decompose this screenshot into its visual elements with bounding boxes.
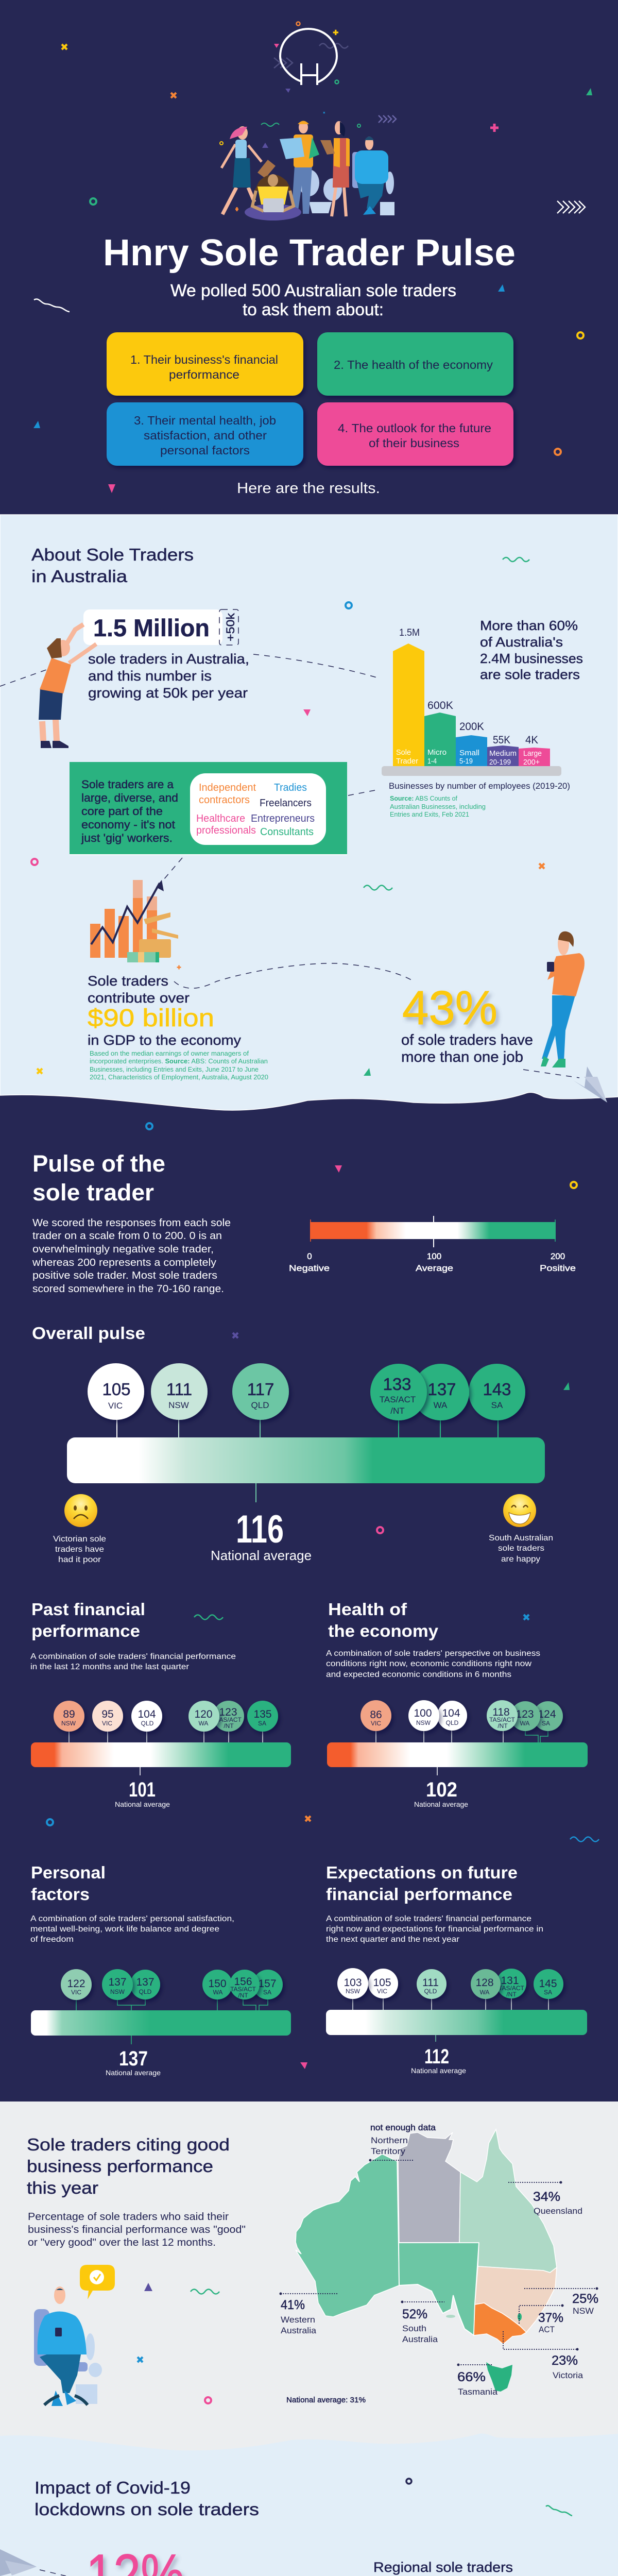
NT label: not enough data: [370, 2123, 436, 2132]
header confetti: [33, 22, 592, 493]
section background: covid impact: [0, 2421, 618, 2576]
pulse explanation text: [32, 1217, 231, 1295]
man in blue sitting: [352, 137, 388, 215]
VIC label: [552, 2353, 583, 2380]
card 3: mental health: personal factors: [160, 444, 250, 457]
balloon QLD: 117: [247, 1380, 274, 1399]
panel: personal factors: [30, 1863, 291, 2077]
chart: businesses by number of employees: 20-199: [489, 758, 511, 767]
panel: personal factors: National average: [106, 2069, 161, 2077]
heading: good business performance: [27, 2135, 230, 2197]
card 2: health of economy: 2. The health of the economy: [334, 358, 493, 371]
balloons: VIC: [71, 1989, 81, 1996]
panel: expectations on future financial performance: right now and expectations for financial performance in: [326, 1925, 543, 1934]
stat: 43 percent more than one job: [401, 981, 533, 1065]
stat: 90 billion GDP: 2021, Characteristics of Employment, Australia, August 2020: [90, 1073, 268, 1081]
chart: businesses by number of employees: 1-4: [427, 757, 437, 766]
heading: pulse of the sole trader: Pulse of the: [32, 1150, 165, 1177]
balloons: 150: [208, 1978, 227, 1990]
stat: 43 percent more than one job: more than one job: [401, 1049, 523, 1065]
heading: impact of covid lockdowns: Impact of Covid-19: [35, 2478, 191, 2497]
chart: businesses by number of employees: Trader: [396, 757, 418, 766]
balloons: 104: [138, 1708, 156, 1720]
balloon VIC: 105: [102, 1380, 131, 1399]
sole traders growth text: [88, 651, 249, 701]
caption: victorian sole traders: [53, 1535, 106, 1564]
panel: past financial performance: in the last 12 months and the last quarter: [30, 1663, 189, 1671]
panel: expectations on future financial performance: the next quarter and the next year: [326, 1935, 459, 1944]
balloons: 100: [414, 1707, 432, 1719]
scale legend 0 to 200: 0: [307, 1251, 312, 1261]
caption: south australian sole traders: sole traders: [498, 1544, 544, 1553]
stat: 43 percent more than one job: of sole traders have: [401, 1032, 533, 1048]
stat: 90 billion GDP: Based on the median earnings of owner managers of: [90, 1049, 249, 1057]
balloons: /NT: [497, 1722, 508, 1730]
national average 31 percent: National average: 31%: [286, 2396, 366, 2404]
panel: health of the economy: conditions right now, economic conditions right now: [326, 1659, 532, 1668]
scale legend 0 to 200: 100: [427, 1251, 441, 1261]
balloon WA: WA: [434, 1400, 448, 1410]
text: more than 60 percent: 2.4M businesses: [480, 651, 583, 666]
heading: about sole traders: [31, 545, 194, 586]
heading: regional sole traders: Regional sole traders: [373, 2560, 513, 2575]
heading: pulse of the sole trader: [32, 1150, 165, 1206]
panel: expectations on future financial performance: financial performance: [326, 1885, 512, 1904]
confetti: [137, 2283, 219, 2403]
TAS label: [457, 2370, 498, 2397]
illustration: paper plane: [0, 2549, 37, 2576]
illustration: man on chair with phone: [34, 2286, 102, 2406]
balloons: 105: [373, 1977, 391, 1989]
sole traders growth text: and this number is: [88, 668, 212, 684]
WA label: Australia: [281, 2326, 317, 2335]
balloons: TAS/ACT: [499, 1985, 525, 1992]
balloons: QLD: [424, 1988, 437, 1995]
balloons: [360, 1700, 563, 1731]
stat: 90 billion GDP: Sole traders: [88, 973, 168, 989]
balloons: WA: [199, 1720, 208, 1727]
panel: personal factors: factors: [31, 1885, 90, 1904]
balloon VIC: [88, 1363, 144, 1420]
woman with clipboard: [320, 121, 350, 216]
balloons: SA: [263, 1989, 271, 1996]
text: more than 60 percent: [480, 618, 583, 682]
heading: impact of covid lockdowns: lockdowns on sole traders: [35, 2500, 259, 2519]
QLD label: [533, 2190, 582, 2216]
WA label: 41%: [281, 2298, 305, 2312]
balloons: [54, 1701, 278, 1732]
balloons: 131: [501, 1975, 519, 1987]
caption: south australian sole traders: [489, 1534, 553, 1564]
balloon SA: SA: [491, 1400, 503, 1410]
balloons: [61, 1969, 283, 2000]
panel: health of the economy: National average: [414, 1800, 468, 1808]
TAS label: Tasmania: [458, 2387, 498, 2397]
chart: businesses by number of employees: Small: [459, 749, 479, 757]
balloon QLD: [232, 1363, 289, 1420]
balloon TAS/ACT/NT: TAS/ACT: [380, 1395, 416, 1404]
NT label: [370, 2123, 436, 2156]
subtitle: We polled 500 Australian sole traders: [170, 281, 456, 300]
panel: health of the economy: and expected economic conditions in 6 months: [326, 1670, 511, 1679]
woman with briefcase: [221, 126, 276, 214]
panel: diverse sole traders: core part of the: [81, 805, 163, 818]
balloon NSW: NSW: [168, 1400, 189, 1410]
balloons: VIC: [377, 1988, 387, 1995]
heading: good business performance: Sole traders citing good: [27, 2135, 230, 2154]
balloons: 137: [108, 1976, 127, 1988]
balloons: /NT: [238, 1992, 248, 1999]
card 1: financial performance: 1. Their business's financial: [130, 353, 278, 366]
caption: south australian sole traders: South Australian: [489, 1534, 553, 1543]
heading: about sole traders: in Australia: [31, 567, 128, 586]
balloons: 122: [67, 1978, 85, 1990]
woman on floor with laptop: [245, 174, 301, 221]
balloons: NSW: [346, 1988, 360, 1995]
balloons: 103: [344, 1977, 362, 1989]
stat: 90 billion GDP: contribute over: [88, 990, 190, 1006]
scale legend 0 to 200: [289, 1216, 576, 1273]
balloons: SA: [542, 1720, 550, 1727]
WA label: [281, 2298, 317, 2335]
balloons: 89: [63, 1708, 75, 1720]
text: more than 60 percent: More than 60%: [480, 618, 578, 633]
card 3: mental health: 3. Their mental health, job: [134, 414, 276, 427]
stat: 90 billion GDP: $90 billion: [88, 1005, 214, 1032]
heading: good business performance: business performance: [27, 2157, 213, 2176]
stat: 90 billion GDP: in GDP to the economy: [88, 1032, 242, 1048]
panel: expectations on future financial performance: National average: [411, 2066, 466, 2075]
balloons: QLD: [139, 1988, 152, 1995]
word cloud of trader types: [190, 773, 326, 845]
national average 116: 116: [236, 1507, 284, 1551]
sole traders growth text: growing at 50k per year: [88, 685, 248, 701]
balloons: [337, 1968, 563, 1999]
panel: past financial performance: [30, 1600, 291, 1808]
pulse section confetti: [47, 1123, 599, 2069]
emoji: sad face: [64, 1494, 97, 1527]
balloon SA: 143: [483, 1380, 511, 1399]
word cloud of trader types: contractors: [199, 794, 250, 806]
panel: personal factors: 137: [119, 2047, 148, 2070]
logo: Hnry H in circle: [280, 29, 337, 85]
balloons: QLD: [141, 1720, 154, 1727]
balloon NSW: [151, 1363, 208, 1420]
about section confetti and dashed paths: [0, 557, 579, 1078]
card 1: financial performance: [107, 332, 303, 396]
balloons: 95: [101, 1708, 114, 1720]
good performance explanation: Percentage of sole traders who said their: [28, 2211, 229, 2223]
chart: businesses by number of employees: 200K: [459, 721, 484, 733]
illustration: man with phone: [541, 931, 585, 1067]
chart: businesses by number of employees: Micro: [427, 748, 447, 757]
word cloud of trader types: Consultants: [260, 826, 314, 838]
panel: diverse sole traders: Sole traders are a: [81, 778, 174, 791]
balloon WA: 137: [427, 1380, 456, 1399]
balloons: VIC: [102, 1720, 112, 1727]
balloons: NSW: [416, 1719, 431, 1726]
heading: pulse of the sole trader: sole trader: [32, 1179, 154, 1206]
heading: good business performance: this year: [27, 2178, 98, 2197]
illustration: paper plane: [573, 1066, 607, 1103]
good performance explanation: business's financial performance was "good": [28, 2224, 246, 2235]
caption: south australian sole traders: are happy: [501, 1555, 540, 1564]
section background: good business performance: [0, 2102, 618, 2450]
chart: businesses by number of employees: 4K: [525, 734, 538, 746]
here are the results: Here are the results.: [237, 480, 380, 497]
good performance explanation: [28, 2211, 246, 2248]
balloons: 120: [194, 1708, 213, 1720]
big number: 1.5 million with +50k tag: 1.5 Million: [93, 614, 210, 641]
balloons: 123: [219, 1706, 237, 1718]
panel: health of the economy: [326, 1600, 588, 1808]
balloons: TAS/ACT: [230, 1986, 256, 1993]
word cloud of trader types: Independent: [199, 782, 256, 793]
good performance explanation: or "very good" over the last 12 months.: [28, 2237, 216, 2248]
balloon TAS/ACT/NT: /NT: [390, 1406, 405, 1416]
panel: health of the economy: 102: [426, 1778, 457, 1801]
word cloud of trader types: Freelancers: [260, 798, 312, 809]
NSW label: [572, 2292, 598, 2316]
chart: businesses by number of employees: 55K: [493, 734, 510, 746]
panel: expectations on future financial performance: [326, 1863, 587, 2075]
NSW label: NSW: [573, 2306, 594, 2316]
balloons: NSW: [110, 1988, 125, 1995]
speech bubble with tick: [80, 2265, 115, 2299]
balloons: WA: [520, 1720, 529, 1727]
balloons: 118: [492, 1706, 510, 1718]
panel: expectations on future financial performance: A combination of sole traders' financial performance: [326, 1914, 531, 1923]
balloon TAS/ACT/NT: [370, 1364, 427, 1420]
balloons: SA: [544, 1989, 552, 1996]
caption: victorian sole traders: Victorian sole: [53, 1535, 106, 1544]
panel: past financial performance: National average: [115, 1800, 170, 1808]
sole traders growth text: sole traders in Australia,: [88, 651, 249, 667]
balloons: /NT: [506, 1991, 517, 1998]
ACT label: ACT: [539, 2325, 555, 2334]
caption: victorian sole traders: traders have: [55, 1545, 104, 1554]
balloons: 111: [422, 1977, 439, 1989]
plant behind group: [299, 170, 394, 215]
stat: 90 billion GDP: Businesses, including Entries and Exits, June 2017 to June: [90, 1065, 259, 1073]
SA label: [402, 2307, 438, 2344]
balloons: 124: [538, 1708, 556, 1720]
word cloud of trader types: Tradies: [274, 782, 307, 793]
panel: personal factors: mental well-being, work life balance and degree: [30, 1925, 219, 1934]
panel: expectations on future financial performance: 112: [424, 2045, 449, 2068]
national average 116: National average: [211, 1548, 312, 1563]
stat: 43 percent more than one job: 43%: [402, 981, 497, 1035]
balloons: 104: [442, 1707, 460, 1719]
stat: 90 billion GDP: [88, 973, 268, 1081]
VIC label: Victoria: [553, 2370, 583, 2380]
panel: past financial performance: A combination of sole traders' financial performance: [30, 1652, 236, 1661]
subtitle: [170, 281, 456, 319]
balloons: WA: [213, 1989, 222, 1996]
panel: health of the economy: A combination of sole traders' perspective on business: [326, 1649, 540, 1658]
panel: personal factors: A combination of sole traders' personal satisfaction,: [30, 1914, 234, 1923]
panel: diverse sole traders: economy - it's not: [81, 818, 175, 831]
QLD label: Queensland: [534, 2206, 582, 2216]
word cloud of trader types: Entrepreneurs: [251, 813, 315, 824]
card 4: outlook: [317, 402, 513, 466]
card 3: mental health: satisfaction, and other: [144, 429, 267, 442]
illustration: man reaching up: [39, 624, 96, 748]
panel: diverse sole traders: just 'gig' workers.: [81, 832, 173, 844]
balloons: 135: [253, 1708, 272, 1720]
balloons: NSW: [61, 1720, 76, 1727]
title: Hnry Sole Trader Pulse: [103, 232, 516, 274]
subtitle: to ask them about:: [243, 300, 384, 319]
section background: about sole traders: [0, 515, 618, 1110]
text: more than 60 percent: of Australia's: [480, 634, 563, 650]
SA label: South: [402, 2324, 426, 2333]
ACT label: [538, 2311, 563, 2334]
word cloud of trader types: Healthcare: [196, 813, 245, 824]
balloons: SA: [258, 1720, 266, 1727]
balloon VIC: VIC: [108, 1401, 123, 1411]
panel: personal factors: of freedom: [30, 1935, 74, 1944]
chart caption and source: [389, 781, 570, 818]
heading: overall pulse: Overall pulse: [32, 1324, 145, 1343]
SA label: 52%: [402, 2307, 427, 2321]
balloons: TAS/ACT: [489, 1716, 516, 1723]
pulse explanation text: whereas 200 represents a completely: [32, 1257, 216, 1268]
covid section confetti and dashed paths: [34, 2479, 618, 2576]
chart caption and source: Australian Businesses, including: [390, 803, 486, 810]
balloons: 123: [516, 1708, 534, 1720]
panel: diverse sole traders: large, diverse, and: [81, 791, 178, 804]
WA label: Western: [281, 2315, 315, 2325]
balloon SA: [469, 1364, 525, 1420]
QLD label: 34%: [533, 2190, 560, 2204]
chart: businesses by number of employees: Sole: [396, 748, 411, 757]
balloon NSW: 111: [166, 1380, 192, 1399]
balloons: 145: [539, 1978, 557, 1990]
card 4: outlook: 4. The outlook for the future: [338, 421, 491, 435]
balloon TAS/ACT/NT: 133: [383, 1375, 411, 1394]
heading: impact of covid lockdowns: [35, 2478, 259, 2519]
card 4: outlook: of their business: [369, 436, 459, 450]
panel: expectations on future financial performance: Expectations on future: [326, 1863, 518, 1882]
chart: businesses by number of employees: Large: [523, 749, 542, 758]
chart: businesses by number of employees: Medium: [489, 749, 517, 758]
big number: 1.5 million with +50k tag: [83, 609, 238, 645]
balloon QLD: QLD: [251, 1400, 269, 1410]
map: good performance by state: [279, 2123, 598, 2397]
NT label: Territory: [371, 2146, 406, 2156]
chart caption and source: Entries and Exits, Feb 2021: [390, 810, 469, 818]
balloons: WA: [480, 1989, 489, 1996]
balloons: /NT: [224, 1722, 234, 1730]
chart: businesses by number of employees: 600K: [427, 700, 453, 711]
balloons: 137: [136, 1976, 154, 1988]
word cloud of trader types: professionals: [196, 825, 256, 836]
national average 116: [211, 1507, 312, 1563]
panel: past financial performance: performance: [31, 1621, 140, 1640]
card 1: financial performance: performance: [169, 368, 239, 381]
chart: businesses by number of employees: 5-19: [459, 757, 473, 766]
NT label: Northern: [371, 2136, 408, 2145]
panel: health of the economy: Health of: [328, 1600, 407, 1619]
pulse explanation text: positive sole trader. Most sole traders: [32, 1270, 217, 1281]
panel: past financial performance: 101: [129, 1778, 156, 1801]
balloons: 156: [234, 1976, 252, 1988]
balloons: 157: [258, 1978, 277, 1990]
text: more than 60 percent: are sole traders: [480, 667, 580, 682]
balloons: 128: [475, 1977, 494, 1989]
scale legend 0 to 200: Average: [416, 1263, 453, 1273]
pulse explanation text: scored somewhere in the 70-160 range.: [32, 1283, 224, 1295]
stat: 90 billion GDP: incorporated enterprises. Source: ABS: Counts of Australian: [90, 1057, 268, 1065]
emoji: happy face: [503, 1494, 536, 1527]
builder with blueprint: [280, 121, 319, 214]
big number: 1.5 million with +50k tag: +50k: [224, 613, 237, 641]
chart caption and source: Source: ABS Counts of: [390, 794, 457, 802]
NSW label: 25%: [572, 2292, 598, 2306]
chart caption and source: Businesses by number of employees (2019-20): [389, 781, 570, 791]
scale legend 0 to 200: 200: [551, 1251, 565, 1261]
panel: past financial performance: Past financial: [31, 1600, 145, 1619]
balloons: TAS/ACT: [216, 1716, 242, 1723]
scale legend 0 to 200: Negative: [289, 1263, 330, 1273]
caption: victorian sole traders: had it poor: [58, 1555, 101, 1564]
card 3: mental health: [107, 402, 303, 466]
scale legend 0 to 200: Positive: [540, 1263, 576, 1273]
balloons: QLD: [446, 1719, 459, 1726]
chart: businesses by number of employees: 200+: [523, 758, 540, 767]
balloon WA: [413, 1364, 469, 1420]
card 2: health of economy: [317, 332, 513, 396]
VIC label: 23%: [552, 2353, 578, 2368]
TAS label: 66%: [457, 2370, 486, 2384]
ACT label: 37%: [538, 2311, 563, 2325]
panel: diverse sole traders: [70, 762, 347, 855]
pulse explanation text: We scored the responses from each sole: [32, 1217, 231, 1229]
panel: personal factors: Personal: [31, 1863, 106, 1882]
heading: about sole traders: About Sole Traders: [31, 545, 194, 564]
chart: businesses by number of employees: 1.5M: [399, 628, 420, 638]
balloons: VIC: [371, 1720, 381, 1727]
panel: health of the economy: the economy: [328, 1621, 439, 1640]
pulse explanation text: overwhelmingly negative sole trader,: [32, 1244, 214, 1255]
SA label: Australia: [402, 2334, 438, 2344]
icon: rising bar chart with coins: [90, 880, 178, 962]
chart: businesses by number of employees: [382, 628, 561, 776]
chart: overall pulse by state: [67, 1363, 545, 1502]
balloons: 86: [370, 1709, 382, 1721]
pulse explanation text: trader on a scale from 0 to 200. 0 is an: [32, 1230, 222, 1242]
illustration: group of sole traders: [221, 121, 394, 221]
